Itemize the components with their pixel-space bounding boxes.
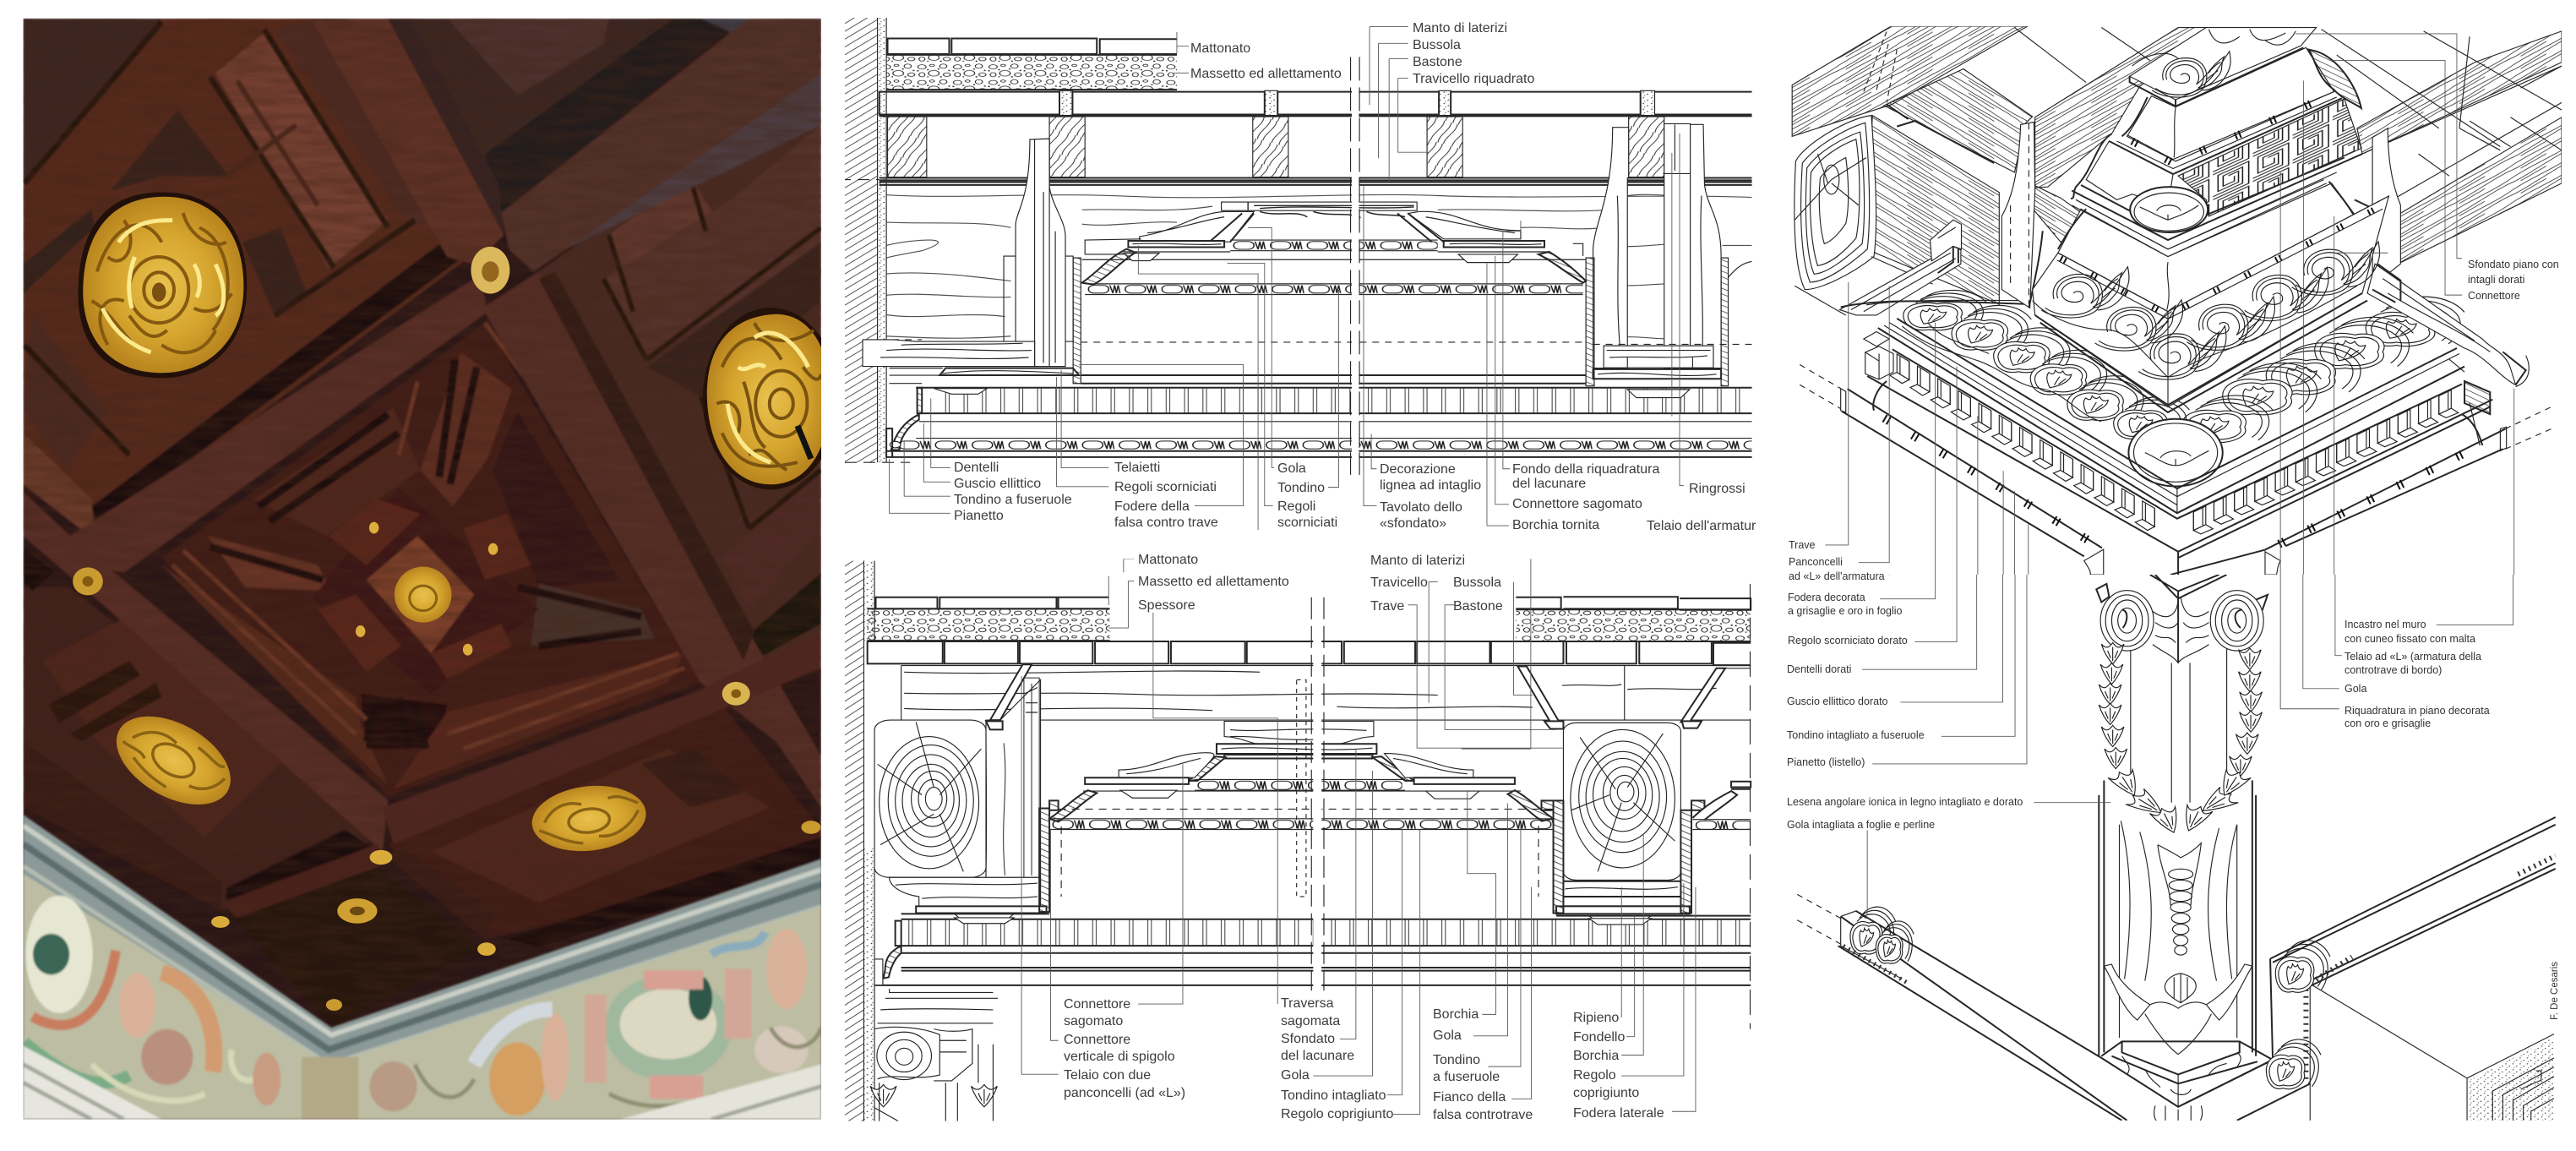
wall: grotesque frescoes (23, 874, 821, 1120)
coffer: upper centre (411, 19, 670, 158)
labels: lower section: Mattonato (1138, 553, 1198, 567)
wood grain overlay (23, 19, 821, 1046)
labels: lower section: Tondino intagliato (1281, 1088, 1386, 1103)
right bottle posts (1073, 123, 1752, 386)
labels: axonometric: Riquadratura in piano decorata (2345, 705, 2490, 717)
labels: lower section: a fuseruole (1433, 1070, 1500, 1084)
labels: lower section: Spessore (1138, 598, 1195, 613)
gold medallion: lower left (117, 717, 231, 805)
labels: upper section: Telaio dell'armatur (1647, 519, 1756, 533)
labels: upper section: falsa contro trave (1114, 515, 1218, 530)
labels: upper section: Decorazione (1380, 462, 1456, 477)
labels: upper section: Massetto ed allettamento (1190, 67, 1342, 81)
gold medallion: lower right (532, 786, 646, 852)
labels: lower section: falsa controtrave (1433, 1108, 1533, 1122)
labels: axonometric: Incastro nel muro (2345, 619, 2426, 630)
gold bosses (73, 247, 820, 1011)
labels: upper section: Telaietti (1114, 461, 1160, 475)
labels: upper section: Dentelli (954, 461, 999, 475)
labels: axonometric: controtrave di bordo) (2345, 664, 2442, 676)
labels: upper section: Tondino (1277, 481, 1325, 495)
labels: axonometric: Gola (2345, 683, 2366, 695)
central white section gap (1351, 46, 1359, 533)
labels: axonometric: Sfondato piano con (2468, 259, 2559, 270)
top right grey corner (569, 32, 821, 248)
panel: upper section drawing (839, 18, 1756, 533)
pilaster shaft (2096, 575, 2268, 1056)
panel: axonometric drawing (1787, 26, 2562, 1122)
labels: axonometric: con oro e grisaglie (2345, 717, 2431, 729)
labels: axonometric: Regolo scorniciato dorato (1788, 635, 1908, 646)
labels: axonometric: Trave (1789, 539, 1816, 551)
labels: axonometric: Dentelli dorati (1787, 663, 1851, 675)
labels: lower section: Connettore (1064, 1033, 1130, 1047)
labels: lower section: Bussola (1453, 576, 1501, 590)
labels: upper section (954, 21, 1756, 533)
labels: axonometric: Pianetto (listello) (1787, 756, 1865, 768)
labels: lower section: coprigiunto (1573, 1086, 1639, 1100)
labels: lower section: panconcelli (ad «L») (1064, 1086, 1185, 1100)
labels: lower section: Traversa (1281, 996, 1334, 1011)
labels: lower section: verticale di spigolo (1064, 1050, 1175, 1064)
scroll frieze (2033, 196, 2388, 412)
labels: upper section: Pianetto (954, 509, 1004, 523)
labels: axonometric (1787, 259, 2560, 1020)
wall hatching (845, 18, 887, 463)
dentils right (1856, 359, 2492, 575)
labels: axonometric: con cuneo fissato con malta (2345, 633, 2475, 645)
labels: axonometric: Fodera decorata (1788, 592, 1865, 603)
right beam end grain (1517, 667, 1725, 922)
L-shaped frame brace (1839, 220, 2030, 315)
meander band (2072, 98, 2362, 249)
lower pyramid faces (2058, 180, 2370, 312)
labels: lower section: Manto di laterizi (1370, 554, 1465, 568)
labels: lower section: Bastone (1453, 599, 1503, 614)
dentil band and cornice (839, 180, 1752, 462)
labels: upper section: Mattonato (1190, 41, 1250, 56)
wooden post (2001, 122, 2043, 308)
labels: lower section: sagomata (1281, 1014, 1340, 1028)
brick floor and screed (886, 38, 1177, 90)
central coffer (1049, 679, 1751, 897)
wall: white cornice bottom (23, 1046, 821, 1120)
labels: lower section: sagomato (1064, 1014, 1123, 1028)
background grid lines (2014, 28, 2562, 176)
wall hatching (845, 561, 874, 1121)
fuseruole rails (1800, 365, 2551, 575)
garlands (2099, 642, 2262, 836)
lower pilaster ornament (2101, 821, 2273, 1122)
floor tiles (868, 641, 1751, 665)
labels: upper section: Ringrossi (1689, 482, 1745, 496)
labels: axonometric: Guscio ellittico dorato (1787, 696, 1888, 707)
labels: axonometric: F. De Cesaris (2550, 962, 2560, 1020)
labels: axonometric: intagli dorati (2468, 274, 2524, 286)
tiles and joists (880, 90, 1752, 185)
labels: upper section: Bastone (1413, 55, 1462, 69)
gold medallion: right (703, 308, 821, 490)
central coffer (161, 323, 700, 796)
right post and brace (2367, 128, 2529, 387)
labels: lower section: Connettore (1064, 997, 1130, 1012)
labels: lower section: Tondino (1433, 1053, 1480, 1067)
gold medallion: upper left (78, 193, 247, 378)
top block with scroll (2130, 28, 2317, 106)
right dashed section line (1749, 584, 1751, 1029)
beams (23, 19, 821, 940)
labels: upper section: Regoli scorniciati (1114, 480, 1217, 494)
labels: lower section: Gola (1281, 1068, 1310, 1083)
labels: upper section: Guscio ellittico (954, 477, 1041, 491)
labels: upper section: Borchia tornita (1512, 518, 1599, 532)
labels: lower section: Gola (1433, 1028, 1462, 1043)
coffer: lower right (388, 705, 821, 946)
labels: lower section: Fondello (1573, 1030, 1625, 1045)
leader lines (1862, 567, 2513, 914)
dentils left (1864, 331, 2154, 531)
panel: lower section drawing (845, 553, 1751, 1122)
labels: axonometric: Tondino intagliato a fuseruole (1787, 729, 1925, 741)
coffer: bottom (226, 866, 480, 1028)
labels: axonometric: Lesena angolare ionica in legno intagliato e dorato (1787, 796, 2023, 808)
central coffer (892, 202, 1752, 384)
long beam (901, 666, 1751, 720)
labels: lower section: Travicello (1370, 576, 1428, 590)
labels: axonometric: Gola intagliata a foglie e perline (1787, 819, 1935, 831)
leader lines (1826, 34, 2514, 575)
labels: lower section: Ripieno (1573, 1011, 1619, 1025)
labels: upper section: «sfondato» (1380, 516, 1446, 531)
bricks and screed (868, 597, 1751, 641)
wall: cornice band (23, 815, 821, 1072)
ionic volutes (2100, 591, 2263, 663)
leader lines (1021, 558, 1696, 1114)
labels: upper section: Fodere della (1114, 499, 1190, 514)
labels: lower section: Borchia (1573, 1049, 1619, 1063)
upper pyramid faces (2071, 47, 2361, 199)
labels: upper section: Gola (1277, 461, 1306, 476)
labels: lower section: Borchia (1433, 1007, 1479, 1022)
labels: lower section: Regolo (1573, 1068, 1616, 1083)
dentil band and cornice (874, 914, 1751, 985)
central white section gap (1311, 597, 1324, 990)
labels: axonometric: ad «L» dell'armatura (1789, 570, 1885, 582)
labels: lower section: Telaio con due (1064, 1068, 1151, 1083)
labels: upper section: Travicello riquadrato (1413, 72, 1534, 86)
labels: upper section: del lacunare (1512, 477, 1586, 491)
coffer: right (539, 74, 821, 661)
left bottle post (863, 139, 1079, 384)
labels: upper section: lignea ad intaglio (1380, 478, 1481, 493)
beams with wood grain (1792, 26, 2562, 304)
labels: axonometric: Connettore (2468, 290, 2520, 302)
panel: ceiling photograph (23, 19, 838, 1120)
coffer: upper left (23, 19, 474, 539)
beam end grain (1794, 116, 1933, 315)
labels: axonometric: a grisaglie e oro in foglio (1788, 605, 1903, 617)
labels: lower section: del lacunare (1281, 1049, 1354, 1063)
labels: axonometric: Panconcelli (1789, 556, 1843, 568)
labels: upper section: scorniciati (1277, 515, 1337, 530)
labels: lower section: Trave (1370, 599, 1404, 614)
coffer: lower left (23, 587, 377, 910)
base mouldings and wall (1797, 817, 2556, 1121)
labels: upper section: Connettore sagomato (1512, 497, 1642, 511)
labels: upper section: Fondo della riquadratura (1512, 462, 1659, 477)
labels: upper section: Manto di laterizi (1413, 21, 1507, 35)
ionic capital (870, 985, 1004, 1121)
labels: axonometric: Telaio ad «L» (armatura della (2345, 651, 2481, 663)
labels: lower section: Fianco della (1433, 1090, 1506, 1105)
labels: upper section: Tavolato dello (1380, 500, 1462, 515)
labels: upper section: Regoli (1277, 499, 1315, 514)
left beam end grain (874, 664, 1059, 921)
labels: lower section (1064, 553, 1664, 1122)
labels: lower section: Massetto ed allettamento (1138, 575, 1289, 589)
entablature mouldings (1878, 319, 2464, 519)
labels: lower section: Regolo coprigiunto (1281, 1107, 1394, 1121)
plank grain (886, 194, 1752, 339)
foliage band (1897, 290, 2464, 488)
leader lines (890, 27, 1684, 530)
labels: upper section: Bussola (1413, 38, 1461, 52)
labels: lower section: Fodera laterale (1573, 1106, 1664, 1121)
labels: upper section: Tondino a fuseruole (954, 493, 1072, 507)
labels: lower section: Sfondato (1281, 1032, 1335, 1046)
